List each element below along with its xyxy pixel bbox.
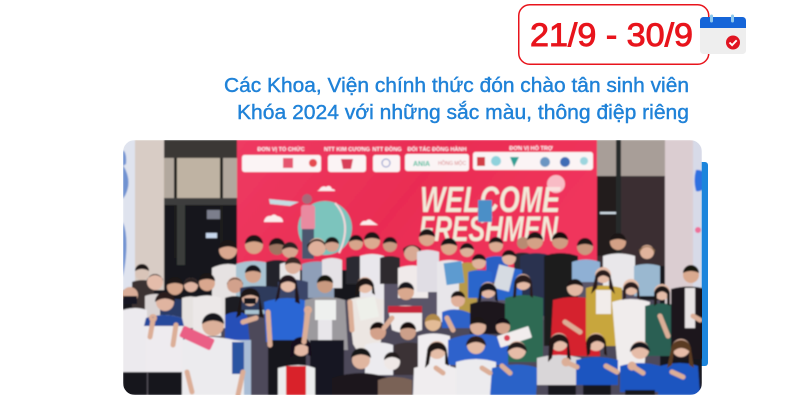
crowd: back row xyxy=(212,229,660,346)
sponsor labels: ĐƠN VỊ HỖ TRỢ xyxy=(509,145,553,152)
crowd backing tones xyxy=(123,270,660,395)
sponsor logos xyxy=(283,156,588,169)
welcome freshmen lettering: WELCOME xyxy=(420,179,561,220)
infographic canvas xyxy=(123,4,746,395)
icon: calendar xyxy=(700,14,746,54)
blue accent bar behind photo xyxy=(690,162,708,366)
sponsor labels xyxy=(257,145,553,153)
sponsor labels: NTT KIM CƯƠNG xyxy=(324,147,370,153)
banner illustration xyxy=(264,186,378,259)
venue background xyxy=(123,140,702,395)
crowd: arms and hands xyxy=(150,302,700,395)
sponsor labels: ĐƠN VỊ TỔ CHỨC xyxy=(257,146,305,153)
sponsor logos: ANIA xyxy=(413,161,430,168)
sponsor labels: ĐỐI TÁC ĐỒNG HÀNH xyxy=(407,146,467,153)
sponsor logos: HỒNG MỘC xyxy=(438,160,466,167)
headline xyxy=(224,75,689,124)
crowd: front row xyxy=(122,275,700,395)
sponsor logo boxes xyxy=(242,152,593,172)
welcome freshmen lettering xyxy=(420,185,561,242)
event group photo xyxy=(122,140,707,395)
headline: Khóa 2024 với những sắc màu, thông điệp riêng xyxy=(237,101,689,124)
date badge: 21/9 - 30/9 xyxy=(530,17,693,53)
date badge xyxy=(519,5,709,64)
headline: Các Khoa, Viện chính thức đón chào tân sinh viên xyxy=(224,75,689,97)
sponsor labels: NTT ĐỒNG xyxy=(372,146,402,153)
crowd: middle row xyxy=(132,250,707,372)
stage banner xyxy=(237,140,597,270)
welcome freshmen lettering: FRESHMEN xyxy=(419,210,559,249)
